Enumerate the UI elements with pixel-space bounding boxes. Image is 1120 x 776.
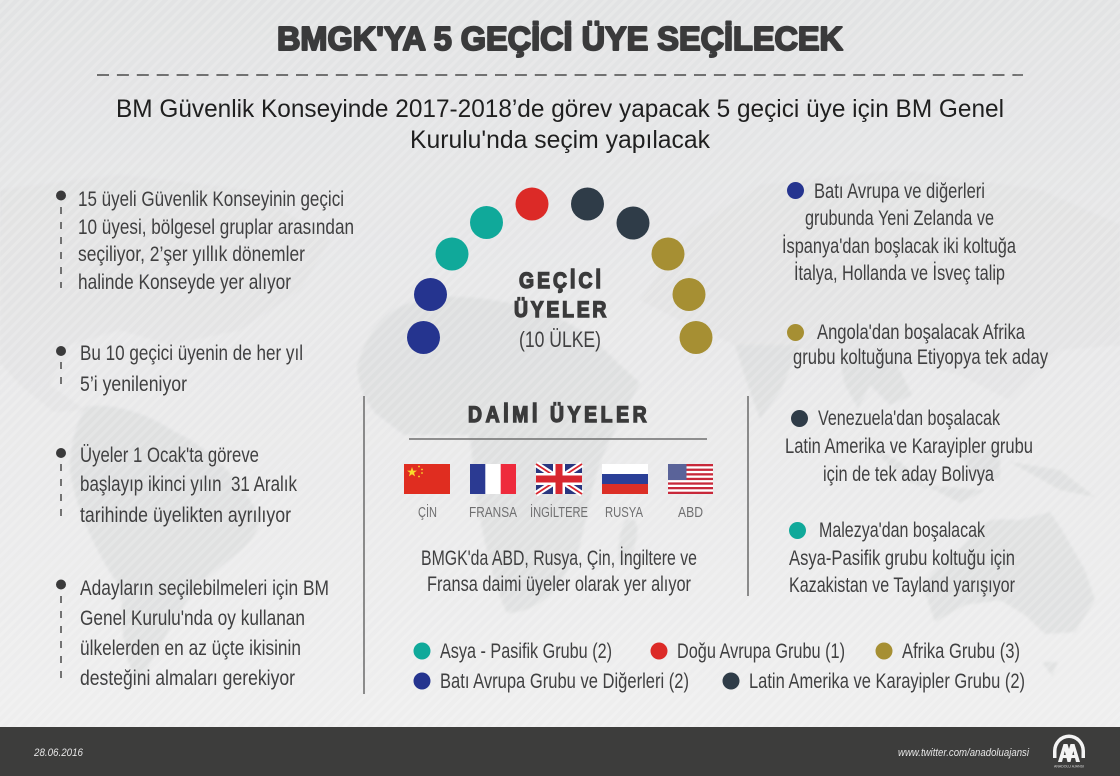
left item 1: halinde Konseyde yer alıyor xyxy=(78,271,291,294)
left item 3: başlayıp ikinci yılın 31 Aralık xyxy=(80,473,297,496)
right item: Africa: Angola'dan boşalacak Afrika xyxy=(817,321,1025,344)
left item 1: 15 üyeli Güvenlik Konseyinin geçici xyxy=(78,188,344,211)
left item 4: Adayların seçilebilmeleri için BM xyxy=(80,577,329,600)
left item 1: 10 üyesi, bölgesel gruplar arasından xyxy=(78,216,354,239)
subtitle: BM Güvenlik Konseyinde 2017-2018’de görev yapacak 5 geçici üye için BM Genel xyxy=(116,95,1004,123)
legend: Afrika Grubu (3) xyxy=(902,640,1020,663)
right item: Asia-Pacific: Kazakistan ve Tayland yarışıyor xyxy=(789,574,1015,597)
right item: Asia-Pacific: Asya-Pasifik grubu koltuğu için xyxy=(789,547,1015,570)
footer bar xyxy=(0,727,1120,776)
left item 2: 5’i yenileniyor xyxy=(80,373,187,396)
legend: Latin Amerika ve Karayipler Grubu (2) xyxy=(749,670,1025,693)
seat arc: temporary members xyxy=(407,188,712,354)
flag: France xyxy=(470,464,516,494)
date: 28.06.2016 xyxy=(33,747,84,759)
temporary members label: (10 ÜLKE) xyxy=(519,327,601,352)
flag labels: ÇİN xyxy=(418,503,437,521)
flag: USA xyxy=(668,464,713,494)
left item 4: desteğini almaları gerekiyor xyxy=(80,667,295,690)
left item 4 xyxy=(56,577,329,690)
permanent members text: Fransa daimi üyeler olarak yer alıyor xyxy=(427,573,691,596)
flag labels: İNGİLTERE xyxy=(530,503,588,521)
right item: Africa xyxy=(787,321,1048,369)
right item: Latin America xyxy=(785,407,1033,486)
right item: Western Europe: grubunda Yeni Zelanda ve xyxy=(805,207,994,230)
permanent members text: BMGK'da ABD, Rusya, Çin, İngiltere ve xyxy=(421,547,697,570)
permanent members heading: DAİMİ ÜYELER xyxy=(468,403,647,427)
icon: AA logo xyxy=(1053,734,1085,768)
permanent members text xyxy=(421,547,697,596)
left item 4: ülkelerden en az üçte ikisinin xyxy=(80,637,301,660)
temporary members label: GEÇİCİ xyxy=(519,269,601,293)
left item 4: Genel Kurulu'nda oy kullanan xyxy=(80,607,305,630)
icon: AA logo: ANADOLU AJANSI xyxy=(1054,764,1084,768)
flag: UK xyxy=(536,464,582,494)
left column xyxy=(56,188,354,690)
legend: Batı Avrupa Grubu ve Diğerleri (2) xyxy=(440,670,689,693)
left item 1: seçiliyor, 2’şer yıllık dönemler xyxy=(78,243,305,266)
right item: Latin America: Latin Amerika ve Karayipler grubu xyxy=(785,435,1033,458)
right item: Latin America: için de tek aday Bolivya xyxy=(823,463,994,486)
right item: Western Europe: İtalya, Hollanda ve İsveç talip xyxy=(794,262,1005,285)
left item 3: tarihinde üyelikten ayrılıyor xyxy=(80,504,291,527)
temporary members label xyxy=(514,269,606,352)
flag: China xyxy=(404,464,450,494)
right item: Western Europe: İspanya'dan boşlacak iki koltuğa xyxy=(782,235,1016,258)
legend xyxy=(414,640,1025,693)
left item 3: Üyeler 1 Ocak'ta göreve xyxy=(80,444,259,467)
permanent members panel xyxy=(404,403,713,596)
right item: Latin America: Venezuela'dan boşalacak xyxy=(818,407,1000,430)
right item: Western Europe: Batı Avrupa ve diğerleri xyxy=(814,180,985,203)
right item: Western Europe xyxy=(782,180,1016,285)
flag labels: FRANSA xyxy=(469,504,517,521)
flag labels: RUSYA xyxy=(605,504,643,521)
flag labels: ABD xyxy=(678,504,703,521)
title: BMGK'YA 5 GEÇİCİ ÜYE SEÇİLECEK xyxy=(277,20,843,57)
temporary members label: ÜYELER xyxy=(514,298,606,322)
right item: Asia-Pacific: Malezya'dan boşalacak xyxy=(819,519,985,542)
subtitle: Kurulu'nda seçim yapılacak xyxy=(410,126,710,154)
twitter link: www.twitter.com/anadoluajansi xyxy=(898,747,1029,759)
right item: Asia-Pacific xyxy=(789,519,1015,597)
right column xyxy=(782,180,1048,597)
left item 2: Bu 10 geçici üyenin de her yıl xyxy=(80,342,303,365)
flag labels xyxy=(418,503,703,521)
legend: Asya - Pasifik Grubu (2) xyxy=(440,640,612,663)
left item 3 xyxy=(56,444,297,527)
right item: Africa: grubu koltuğuna Etiyopya tek aday xyxy=(793,346,1048,369)
subtitle xyxy=(116,95,1004,154)
legend: Doğu Avrupa Grubu (1) xyxy=(677,640,845,663)
left item 2 xyxy=(56,342,303,396)
left item 1 xyxy=(56,188,354,294)
flag: Russia xyxy=(602,464,648,494)
world map xyxy=(0,170,1120,680)
